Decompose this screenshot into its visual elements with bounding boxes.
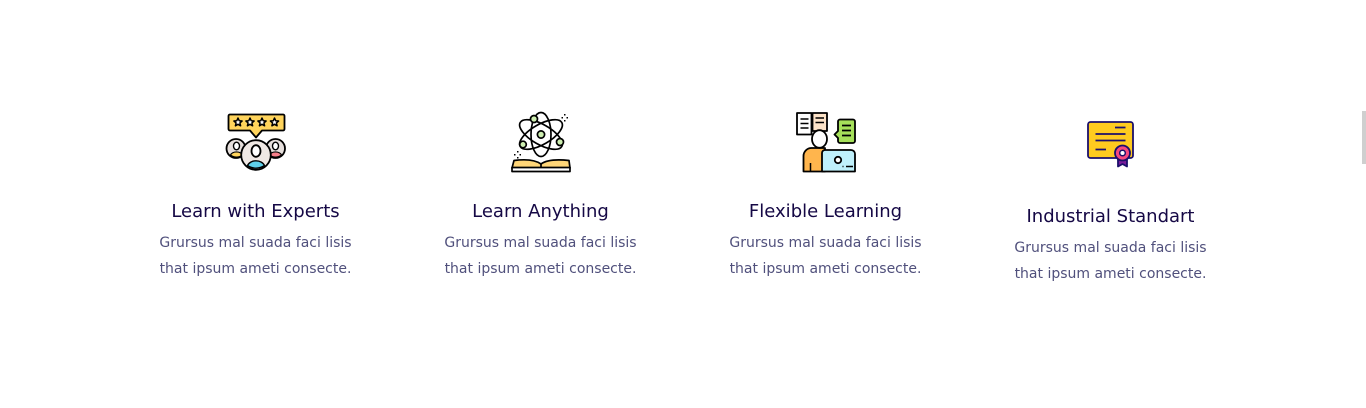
panel: learn with experts xyxy=(159,114,352,277)
text block xyxy=(1014,240,1207,282)
heading: Learn with Experts xyxy=(171,201,340,222)
text block: Grursus mal suada faci lisis xyxy=(444,235,637,251)
heading: Flexible Learning xyxy=(749,201,902,222)
icon: certificate xyxy=(1087,121,1134,168)
text block: Grursus mal suada faci lisis xyxy=(1014,240,1207,256)
icon: atom over open book xyxy=(511,112,571,172)
icon: expert ratings xyxy=(226,114,286,171)
scrollbar thumb xyxy=(1362,111,1366,164)
panel: industrial standart xyxy=(1014,121,1207,282)
icon: learner with laptop xyxy=(796,112,856,172)
text block: that ipsum ameti consecte. xyxy=(445,261,636,277)
panel: flexible learning xyxy=(729,112,922,277)
text block: that ipsum ameti consecte. xyxy=(730,261,921,277)
heading: Industrial Standart xyxy=(1026,206,1194,227)
heading: Learn Anything xyxy=(472,201,609,222)
panel: learn anything xyxy=(444,112,637,277)
text block xyxy=(159,235,352,277)
text block: Grursus mal suada faci lisis xyxy=(159,235,352,251)
text block xyxy=(444,235,637,277)
text block: that ipsum ameti consecte. xyxy=(1015,266,1206,282)
text block: that ipsum ameti consecte. xyxy=(160,261,351,277)
text block xyxy=(729,235,922,277)
text block: Grursus mal suada faci lisis xyxy=(729,235,922,251)
